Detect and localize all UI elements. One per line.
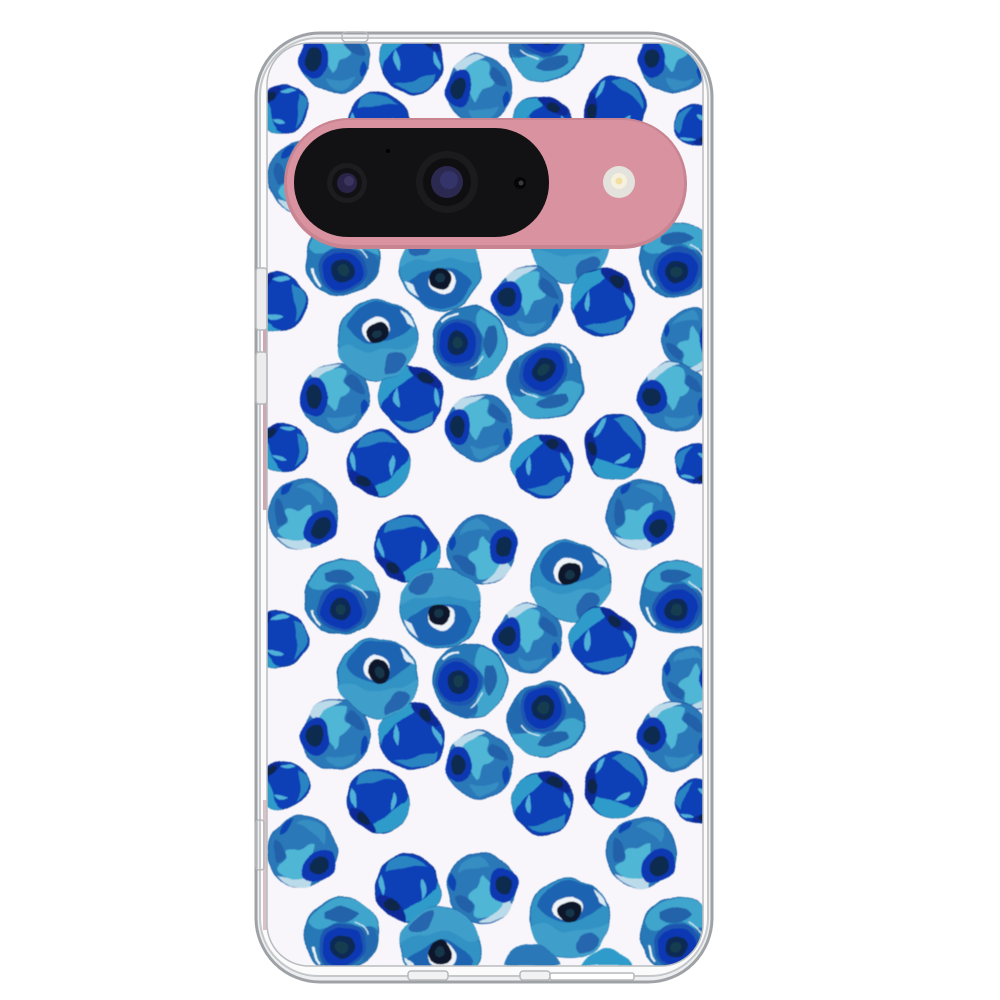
flash [603, 166, 635, 198]
phone case product illustration [254, 31, 714, 984]
side edge showing pink phone frame [263, 270, 267, 930]
camera bar [284, 118, 687, 249]
black lens window [294, 128, 549, 237]
sensor dot [514, 177, 526, 189]
main lens [416, 151, 478, 213]
printed blueberry pattern [268, 44, 702, 966]
clear case outer shell [256, 33, 712, 982]
inner case outline [267, 43, 703, 966]
case buttons and bumps [256, 32, 634, 980]
small lens [327, 163, 367, 203]
pink housing face [287, 120, 684, 245]
microphone dot [386, 149, 390, 153]
pink camera housing [284, 118, 687, 249]
